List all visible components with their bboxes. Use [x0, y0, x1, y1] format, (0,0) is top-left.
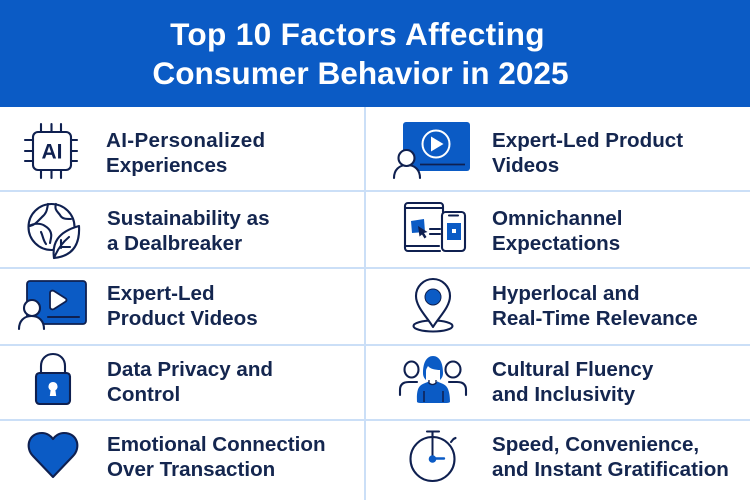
- title: Consumer Behavior in 2025: [152, 55, 569, 91]
- icon: video presenter with round play button: [392, 122, 470, 179]
- label: a Dealbreaker: [107, 232, 242, 255]
- label: Cultural Fluency: [492, 358, 653, 381]
- label: Expectations: [492, 232, 620, 255]
- panel: Emotional Connection Over Transaction: [28, 432, 326, 481]
- icon: video presenter: [18, 280, 87, 330]
- header banner: [0, 0, 750, 107]
- label: and Instant Gratification: [492, 458, 729, 481]
- panel: Data Privacy and Control: [34, 353, 273, 406]
- label: Expert-Led: [107, 282, 215, 305]
- panel: Expert-Led Product Videos (right): [392, 122, 683, 179]
- label: [107, 282, 258, 330]
- label: [492, 207, 622, 255]
- panel: Omnichannel Expectations: [404, 202, 622, 255]
- label: Speed, Convenience,: [492, 433, 699, 456]
- label: AI-Personalized: [106, 129, 265, 152]
- label: [107, 207, 270, 255]
- label: [492, 129, 683, 177]
- label: Videos: [492, 154, 559, 177]
- label: Control: [107, 383, 180, 406]
- title: Top 10 Factors Affecting: [170, 16, 545, 52]
- label: [492, 358, 654, 406]
- panel: Speed, Convenience, and Instant Gratification: [409, 430, 729, 482]
- icon: globe with leaf: [27, 202, 80, 260]
- icon: map pin: [412, 278, 454, 332]
- title: [152, 16, 569, 91]
- label: [107, 433, 326, 481]
- label: Emotional Connection: [107, 433, 326, 456]
- label: Product Videos: [107, 307, 258, 330]
- label: and Inclusivity: [492, 383, 635, 406]
- label: [106, 129, 265, 177]
- icon: AI chip: [24, 123, 78, 179]
- label: Real-Time Relevance: [492, 307, 698, 330]
- icon: tablet and phone: [404, 202, 466, 252]
- panel: AI-Personalized Experiences: [24, 123, 265, 179]
- panel: Sustainability as a Dealbreaker: [27, 202, 270, 260]
- panel: Cultural Fluency and Inclusivity: [398, 356, 654, 406]
- label: [107, 358, 273, 406]
- label: [492, 433, 729, 481]
- label: Experiences: [106, 154, 227, 177]
- icon: heart: [28, 432, 78, 478]
- panel: Expert-Led Product Videos (left): [18, 280, 258, 330]
- icon: padlock: [34, 353, 72, 405]
- label: Data Privacy and: [107, 358, 273, 381]
- icon: AI chip: AI: [42, 140, 62, 164]
- label: Expert-Led Product: [492, 129, 683, 152]
- label: Over Transaction: [107, 458, 275, 481]
- panel: Hyperlocal and Real-Time Relevance: [412, 278, 698, 332]
- label: [492, 282, 698, 330]
- icon: group of people: [398, 356, 468, 403]
- label: Sustainability as: [107, 207, 270, 230]
- label: Hyperlocal and: [492, 282, 640, 305]
- icon: stopwatch: [409, 430, 457, 482]
- label: Omnichannel: [492, 207, 622, 230]
